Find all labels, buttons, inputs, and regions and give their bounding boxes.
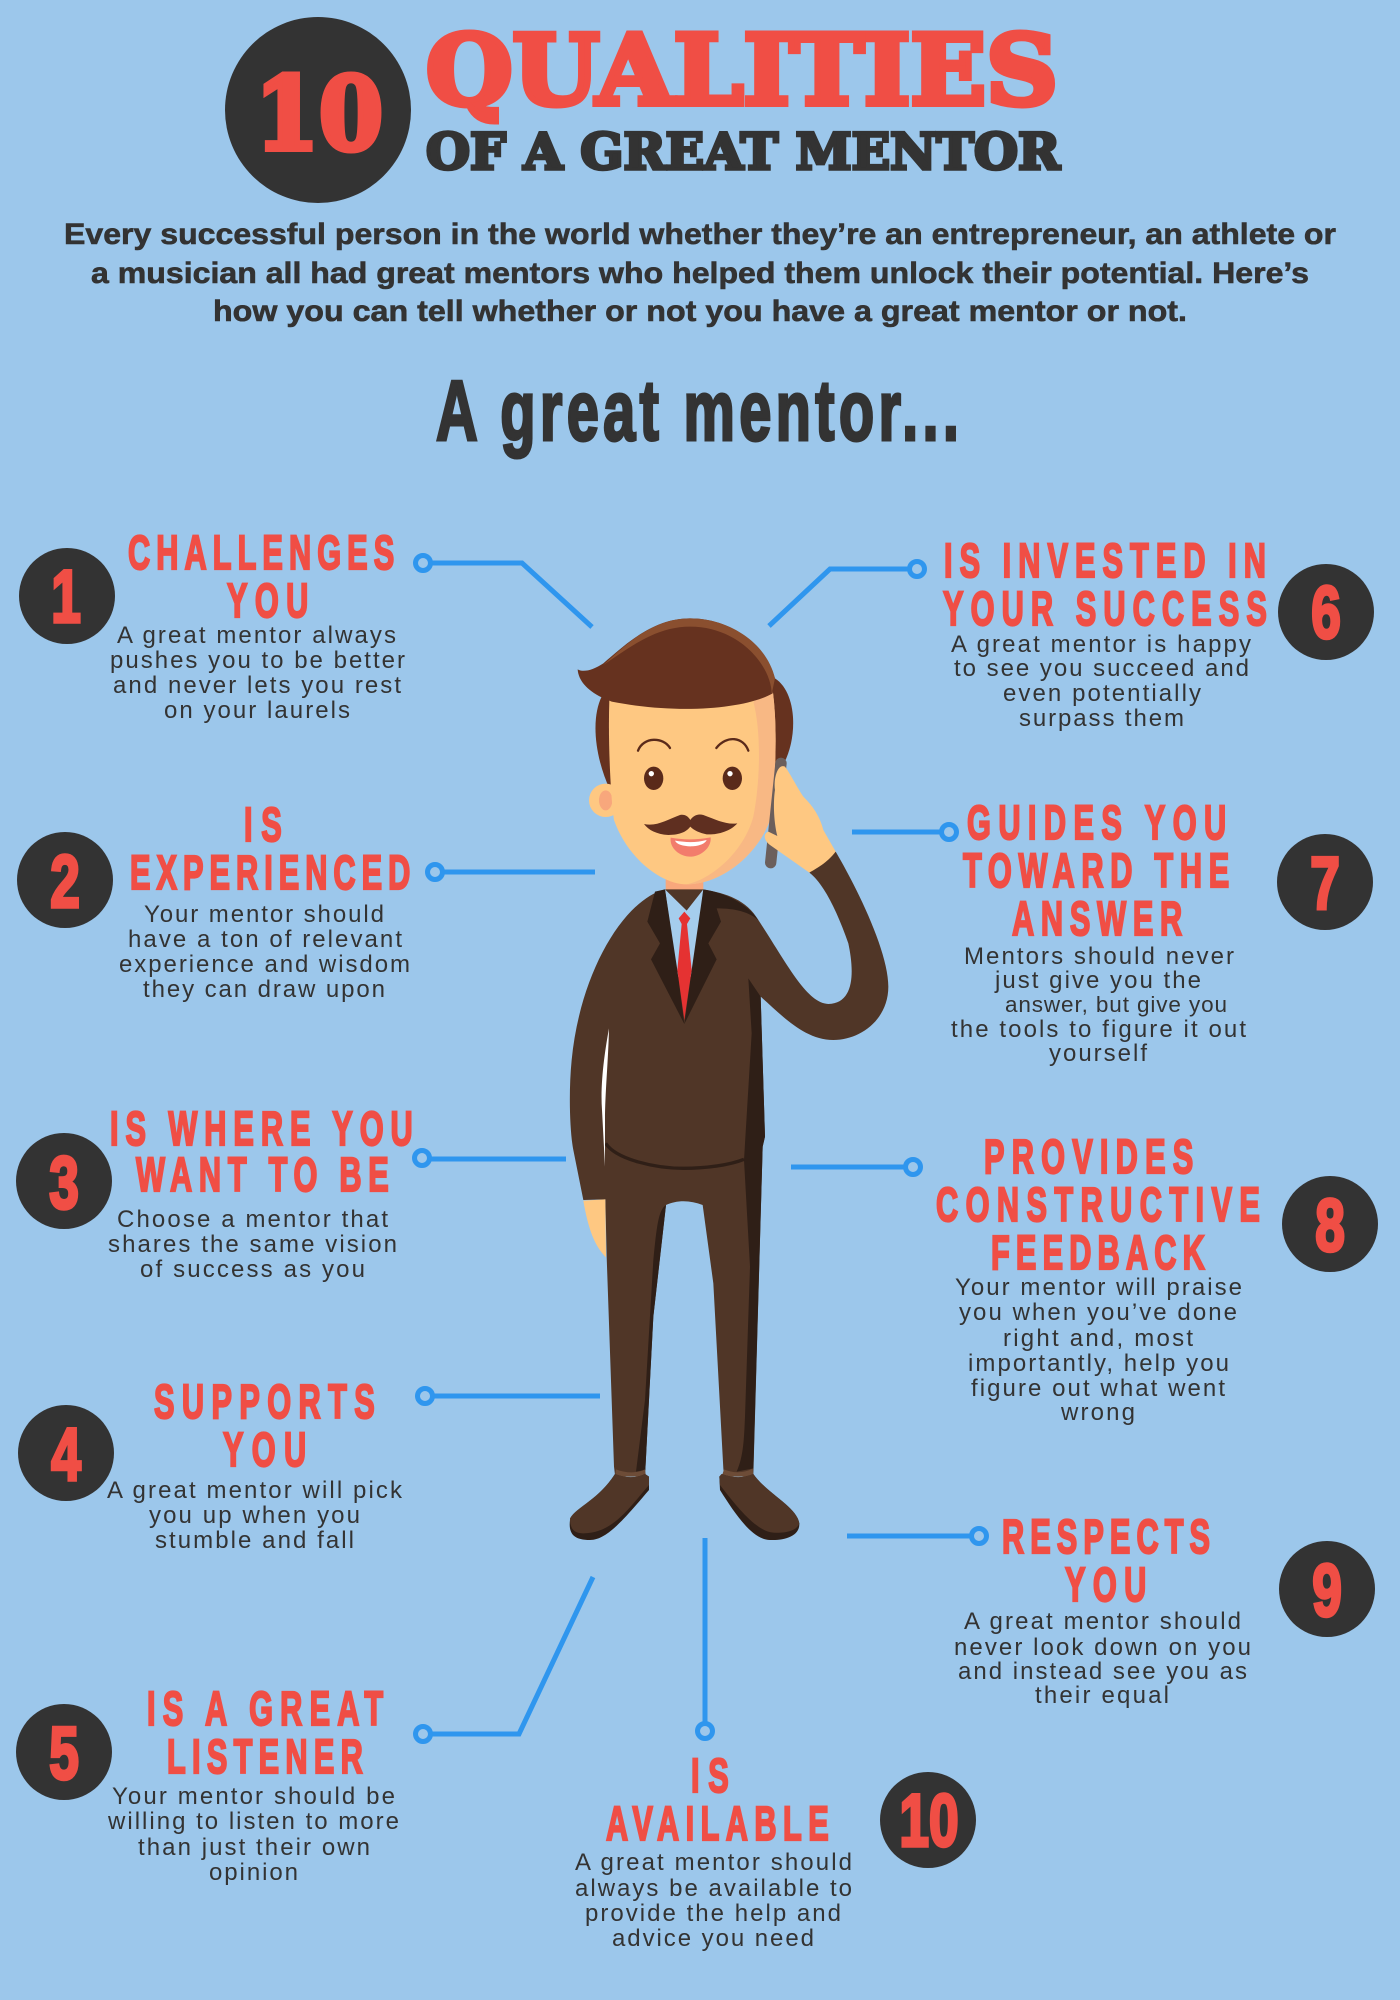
subheading: A great mentor... xyxy=(436,364,959,459)
heading 8 xyxy=(936,1130,1260,1280)
description 4: stumble and fall xyxy=(155,1527,354,1554)
eyes xyxy=(644,767,742,790)
connector 4 xyxy=(418,1388,600,1404)
right hand xyxy=(765,766,836,873)
description 2: Your mentor should xyxy=(144,901,384,928)
description 6: to see you succeed and xyxy=(954,655,1249,682)
heading 6: YOUR SUCCESS xyxy=(943,582,1267,636)
badge 8: 8 xyxy=(1315,1184,1345,1267)
description 8: importantly, help you xyxy=(968,1350,1229,1377)
heading 4: YOU xyxy=(223,1423,306,1477)
heading 3: IS WHERE YOU xyxy=(110,1102,413,1156)
heading 8: FEEDBACK xyxy=(991,1226,1205,1280)
heading 10 xyxy=(606,1749,829,1851)
shirt xyxy=(665,889,703,977)
badge 1 xyxy=(19,548,115,644)
description 5: willing to listen to more xyxy=(107,1808,399,1835)
connector 5 xyxy=(416,1577,593,1742)
suit and trousers xyxy=(570,852,888,1475)
description 9: and instead see you as xyxy=(958,1658,1247,1685)
badge 4: 4 xyxy=(51,1413,81,1496)
description 7: Mentors should never xyxy=(964,943,1234,970)
description 2: have a ton of relevant xyxy=(128,926,402,953)
description 4: you up when you xyxy=(149,1502,360,1529)
badge 6 xyxy=(1278,564,1374,660)
description 10: advice you need xyxy=(612,1925,814,1952)
badge 7: 7 xyxy=(1310,842,1340,925)
heading 7: TOWARD THE xyxy=(963,844,1229,898)
description 5: opinion xyxy=(209,1859,298,1886)
hair highlight xyxy=(603,618,775,694)
intro text: a musician all had great mentors who helped them unlock their potential. Here’s xyxy=(91,257,1309,290)
description 3: Choose a mentor that xyxy=(117,1206,388,1233)
description 5: Your mentor should be xyxy=(112,1783,395,1810)
description 1: A great mentor always xyxy=(117,622,396,649)
description 10: provide the help and xyxy=(585,1900,841,1927)
panel: item 4 supports you xyxy=(18,1375,600,1554)
title xyxy=(225,14,1060,203)
illustration: mentor on phone xyxy=(570,618,888,1540)
panel: item 7 guides you toward the answer xyxy=(852,796,1373,1067)
badge 2 xyxy=(17,832,113,928)
moustache xyxy=(644,815,737,835)
badge 10: 10 xyxy=(899,1779,959,1862)
badge 10 xyxy=(880,1772,976,1868)
intro text: Every successful person in the world whether they’re an entrepreneur, an athlete or xyxy=(64,218,1336,251)
heading 1 xyxy=(128,526,394,628)
title badge: 10 xyxy=(225,17,411,203)
description 1: on your laurels xyxy=(164,697,350,724)
description 8 xyxy=(955,1274,1242,1426)
heading 2: IS xyxy=(244,798,282,852)
heading 6 xyxy=(943,534,1267,636)
heading 1: YOU xyxy=(227,574,308,628)
description 6 xyxy=(951,631,1251,732)
heading 7: ANSWER xyxy=(1012,892,1182,946)
heading 10: IS xyxy=(691,1749,729,1803)
description 1 xyxy=(110,622,405,724)
badge 5 xyxy=(16,1704,112,1800)
panel: item 5 is a great listener xyxy=(16,1577,593,1886)
description 1: and never lets you rest xyxy=(113,672,401,699)
title badge: 10: 10 xyxy=(255,55,383,173)
suit shading xyxy=(636,978,765,1472)
badge 9: 9 xyxy=(1312,1549,1342,1632)
badge 6: 6 xyxy=(1311,571,1341,654)
description 2: they can draw upon xyxy=(143,976,385,1003)
heading 9: YOU xyxy=(1065,1558,1146,1612)
subtitle: OF A GREAT MENTOR xyxy=(426,122,1060,181)
panel: item 10 is available xyxy=(575,1538,976,1952)
description 3: of success as you xyxy=(140,1256,365,1283)
panel: item 8 provides constructive feedback xyxy=(791,1130,1378,1426)
heading 2: EXPERIENCED xyxy=(130,846,410,900)
description 8: figure out what went xyxy=(971,1375,1225,1402)
description 3: shares the same vision xyxy=(108,1231,397,1258)
panel: item 3 is where you want to be xyxy=(16,1102,566,1283)
description 8: Your mentor will praise xyxy=(955,1274,1242,1301)
intro text xyxy=(64,218,1336,328)
badge 1: 1 xyxy=(51,555,81,638)
description 9: never look down on you xyxy=(954,1634,1251,1661)
panel: item 9 respects you xyxy=(847,1510,1375,1709)
description 9 xyxy=(954,1608,1251,1709)
badge 3: 3 xyxy=(49,1141,79,1224)
phone xyxy=(771,763,791,863)
description 9: A great mentor should xyxy=(964,1608,1241,1635)
description 6: even potentially xyxy=(1003,680,1201,707)
heading 9 xyxy=(1002,1510,1210,1612)
mouth xyxy=(671,837,711,857)
heading 7: GUIDES YOU xyxy=(967,796,1226,850)
neck xyxy=(666,877,703,910)
face xyxy=(609,690,776,884)
description 7: yourself xyxy=(1049,1040,1147,1067)
description 10: always be available to xyxy=(575,1875,852,1902)
description 1: pushes you to be better xyxy=(110,647,405,674)
left shoe xyxy=(570,1469,649,1540)
description 5 xyxy=(107,1783,399,1886)
heading 5: IS A GREAT xyxy=(147,1682,383,1736)
intro text: how you can tell whether or not you have a great mentor or not. xyxy=(213,295,1187,328)
title word: qualities: QUALITIES xyxy=(426,14,1058,127)
heading 7 xyxy=(963,796,1229,946)
panel: item 2 is experienced xyxy=(17,798,595,1003)
badge 7 xyxy=(1277,834,1373,930)
ear xyxy=(589,784,622,817)
description 5: than just their own xyxy=(138,1834,370,1861)
badge 2: 2 xyxy=(50,840,80,923)
description 7: answer, but give you xyxy=(1005,992,1227,1017)
heading 8: PROVIDES xyxy=(984,1130,1193,1184)
description 10: A great mentor should xyxy=(575,1849,852,1876)
tie xyxy=(677,912,692,1020)
heading 5 xyxy=(147,1682,383,1784)
panel: item 6 is invested in your success xyxy=(769,534,1374,732)
badge 9 xyxy=(1279,1541,1375,1637)
description 2 xyxy=(119,901,410,1003)
face shade xyxy=(687,690,776,884)
left hand xyxy=(583,1199,606,1257)
description 4 xyxy=(107,1477,403,1554)
description 8: wrong xyxy=(1060,1399,1135,1426)
jacket hem xyxy=(606,1143,744,1168)
hair back xyxy=(595,678,793,790)
right shoe xyxy=(719,1469,799,1540)
heading 3 xyxy=(110,1102,413,1202)
badge 5: 5 xyxy=(49,1712,79,1795)
heading 4: SUPPORTS xyxy=(154,1375,375,1429)
description 6: A great mentor is happy xyxy=(951,631,1251,658)
connector 8 xyxy=(791,1160,920,1174)
description 10 xyxy=(575,1849,852,1952)
connector 7 xyxy=(852,824,956,840)
heading 3: WANT TO BE xyxy=(136,1148,389,1202)
eyebrows xyxy=(638,739,748,751)
description 8: you when you’ve done xyxy=(959,1299,1237,1326)
connector 1 xyxy=(416,556,592,627)
connector 2 xyxy=(428,864,595,880)
heading 9: RESPECTS xyxy=(1002,1510,1210,1564)
lapels xyxy=(647,889,758,1024)
panel: item 1 challenges you xyxy=(19,526,592,724)
badge 8 xyxy=(1282,1176,1378,1272)
description 6: surpass them xyxy=(1019,705,1184,732)
description 2: experience and wisdom xyxy=(119,951,410,978)
heading 5: LISTENER xyxy=(167,1730,363,1784)
badge 4 xyxy=(18,1405,114,1501)
connector 6 xyxy=(769,562,924,626)
description 9: their equal xyxy=(1035,1682,1169,1709)
connector 3 xyxy=(414,1150,566,1166)
badge 3 xyxy=(16,1133,112,1229)
description 4: A great mentor will pick xyxy=(107,1477,403,1504)
description 8: right and, most xyxy=(1003,1325,1193,1352)
description 7 xyxy=(951,943,1246,1067)
description 7: just give you the xyxy=(994,967,1201,994)
connector 9 xyxy=(847,1528,986,1544)
heading 10: AVAILABLE xyxy=(606,1797,829,1851)
connector 10 xyxy=(698,1538,712,1738)
heading 8: CONSTRUCTIVE xyxy=(936,1178,1260,1232)
description 3 xyxy=(108,1206,397,1283)
white sliver xyxy=(602,1028,609,1167)
heading 6: IS INVESTED IN xyxy=(944,534,1266,588)
heading 4 xyxy=(154,1375,375,1477)
heading 1: CHALLENGES xyxy=(128,526,394,580)
heading 2 xyxy=(130,798,410,900)
description 7: the tools to figure it out xyxy=(951,1016,1246,1043)
hair xyxy=(578,618,775,709)
